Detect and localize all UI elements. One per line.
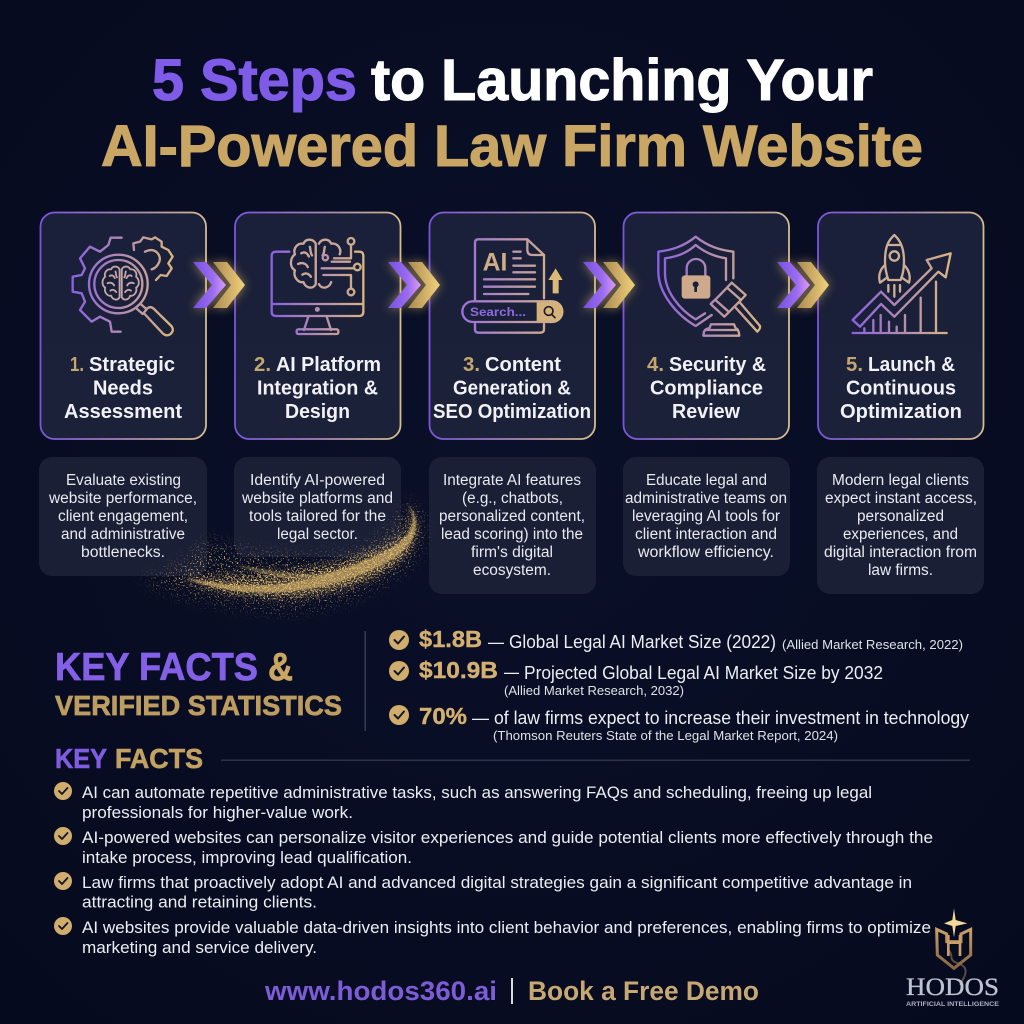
step 4 heading: 4.: [647, 354, 664, 376]
panel: step 3 description: ecosystem.: [473, 562, 551, 579]
panel: step 1 description: website performance,: [48, 490, 197, 507]
icon: check badge: [54, 917, 72, 935]
key fact 3: Law firms that proactively adopt AI and advanced digital strategies gain a significant competitive advantage in: [82, 873, 912, 892]
heading: key facts: [55, 743, 203, 774]
step 3 heading: 3.: [463, 354, 480, 376]
title line 2: AI-Powered Law Firm Website: [101, 114, 923, 179]
panel: step 3 description: lead scoring) into the: [441, 526, 583, 543]
arrow: step 1 to 2: [193, 262, 245, 308]
step 5 heading: Continuous: [846, 378, 956, 400]
step 3 heading: Generation &: [453, 378, 571, 400]
footer call to action: [264, 976, 759, 1006]
step 2 heading: 2.: [254, 354, 271, 376]
step 1 heading: Assessment: [64, 401, 182, 423]
icon: monitor with AI brain: [272, 238, 363, 334]
panel: step 5 card: [818, 212, 984, 439]
panel: step 3 description: [429, 457, 596, 594]
key fact 2: intake process, improving lead qualification.: [82, 848, 412, 867]
heading: key facts and verified statistics: VERIFIED STATISTICS: [55, 690, 342, 721]
panel: step 5 description: Modern legal clients: [832, 472, 969, 489]
heading: key facts and verified statistics: [55, 646, 342, 721]
footer call to action: Book a Free Demo: [528, 976, 759, 1006]
panel: step 1 description: bottlenecks.: [81, 544, 165, 561]
panel: step 2 description: website platforms and: [241, 490, 393, 507]
step 5 heading: 5.: [846, 354, 863, 376]
panel: step 5 description: experiences, and: [843, 526, 958, 543]
statistic: 10.9B projected size: Projected Global Legal AI Market Size by 2032: [524, 663, 883, 683]
panel: step 2 description: legal sector.: [277, 526, 358, 543]
gold dust swirl: [137, 500, 423, 610]
arrow: step 4 to 5: [777, 262, 829, 308]
statistic: 10.9B projected size: —: [504, 662, 519, 682]
key fact 1: AI can automate repetitive administrative tasks, such as answering FAQs and scheduling, freeing up legal: [82, 783, 872, 802]
step 4 heading: Security &: [669, 354, 766, 376]
icon: AI document with search bar: [462, 239, 563, 333]
statistic: 70 percent of firms: (Thomson Reuters State of the Legal Market Report, 2024): [493, 728, 838, 743]
statistic: 1.8B market size: Global Legal AI Market Size (2022): [509, 632, 776, 652]
step 4 heading: Compliance: [650, 378, 763, 400]
statistic: 1.8B market size: —: [488, 632, 504, 652]
panel: step 2 description: tools tailored for the: [249, 508, 386, 525]
panel: step 1 description: Evaluate existing: [66, 472, 181, 489]
icon: AI document with search bar: AI: [483, 250, 507, 277]
heading: key facts: KEY: [55, 743, 107, 774]
icon: rocket and growth chart: [853, 235, 951, 333]
statistic: 1.8B market size: $1.8B: [419, 626, 482, 652]
step 4 heading: Review: [672, 401, 740, 423]
icon: check badge: [54, 782, 72, 800]
logo wordmark: HODOS: [906, 974, 999, 1001]
footer call to action: www.hodos360.ai: [264, 976, 497, 1006]
step 3 heading: Content: [485, 354, 561, 376]
panel: step 2 description: Identify AI-powered: [250, 472, 385, 489]
panel: step 1 description: [39, 457, 207, 576]
panel: step 5 description: expect instant access,: [825, 490, 977, 507]
panel: step 3 description: (e.g., chatbots,: [462, 490, 563, 507]
step 1 heading: Needs: [93, 378, 153, 400]
panel: step 4 description: [623, 457, 790, 576]
step 2 heading: Design: [285, 401, 350, 423]
panel: step 3 description: firm's digital: [471, 544, 553, 561]
step 5 heading: Optimization: [840, 401, 962, 423]
panel: step 2 card: [235, 212, 400, 439]
statistic: 1.8B market size: [389, 626, 963, 652]
panel: step 3 description: Integrate AI features: [443, 472, 581, 489]
panel: step 4 description: leveraging AI tools for: [632, 508, 780, 525]
key fact 3: [54, 872, 912, 912]
panel: step 4 description: workflow efficiency.: [637, 544, 774, 561]
panel: step 1 card: [40, 212, 206, 439]
step 3 heading: [433, 354, 591, 423]
logo tagline: ARTIFICIAL INTELLIGENCE: [906, 1001, 1000, 1008]
icon: check badge: [54, 872, 72, 890]
step 1 heading: [64, 354, 182, 423]
panel: step 4 description: Educate legal and: [646, 472, 767, 489]
step 4 heading: [647, 354, 766, 423]
panel: step 4 card: [624, 212, 789, 439]
icon: check badge: [389, 630, 409, 650]
icon: AI document with search bar: Search...: [470, 306, 526, 319]
step 5 heading: Launch &: [868, 354, 955, 376]
icon: check badge: [389, 661, 409, 681]
heading: key facts and verified statistics: KEY FACTS: [55, 646, 258, 689]
panel: step 2 description: [234, 457, 401, 557]
title line 1: 5 Steps: [152, 48, 357, 113]
statistic: 70 percent of firms: [389, 703, 969, 743]
statistic: 1.8B market size: (Allied Market Research, 2022): [782, 637, 963, 652]
title line 1: [152, 48, 873, 113]
statistic: 10.9B projected size: [389, 657, 883, 698]
title: [101, 48, 923, 179]
statistic: 70 percent of firms: 70%: [419, 703, 467, 729]
key fact 3: attracting and retaining clients.: [82, 892, 317, 912]
key fact 4: AI websites provide valuable data-driven insights into client behavior and preferences, enabling firms to optimize: [82, 918, 931, 937]
step 2 heading: [254, 354, 381, 423]
heading: key facts: FACTS: [115, 743, 203, 774]
arrow: step 2 to 3: [388, 262, 440, 308]
key fact 4: marketing and service delivery.: [82, 938, 317, 957]
step 1 heading: 1.: [70, 354, 84, 376]
statistic: 70 percent of firms: —: [472, 708, 489, 728]
key fact 1: professionals for higher-value work.: [82, 803, 353, 822]
heading: key facts and verified statistics: &: [268, 646, 293, 689]
panel: step 4 description: administrative teams on: [625, 490, 787, 507]
key fact 2: AI-powered websites can personalize visitor experiences and guide potential clients more effectively through the: [82, 828, 933, 847]
logo: Hodos: [906, 908, 1000, 1008]
step 1 heading: Strategic: [89, 354, 175, 376]
panel: step 5 description: digital interaction from: [824, 544, 977, 561]
step 5 heading: [840, 354, 962, 423]
step 2 heading: AI Platform: [276, 354, 381, 376]
panel: step 1 description: and administrative: [61, 526, 185, 543]
icon: check badge: [389, 705, 409, 725]
statistic: 10.9B projected size: $10.9B: [419, 657, 498, 683]
statistic: 70 percent of firms: of law firms expect to increase their investment in technology: [494, 708, 969, 728]
logo emblem: [937, 908, 971, 985]
panel: step 5 description: law firms.: [868, 562, 933, 579]
panel: step 3 description: personalized content,: [439, 508, 585, 525]
step 3 heading: SEO Optimization: [433, 401, 591, 423]
icon: check badge: [54, 827, 72, 845]
step 2 heading: Integration &: [257, 378, 378, 400]
arrow: step 3 to 4: [583, 262, 635, 308]
key fact 2: [54, 827, 933, 867]
icon: gear, magnifier and brain: [73, 237, 173, 335]
key fact 4: [54, 917, 931, 957]
icon: shield, lock and gavel: [658, 237, 760, 336]
panel: step 5 description: personalized: [857, 508, 944, 525]
panel: step 5 description: [817, 457, 984, 594]
panel: step 3 card: [430, 212, 595, 439]
title line 1: to Launching Your: [371, 48, 873, 113]
panel: step 4 description: client interaction and: [635, 526, 777, 543]
key fact 1: [54, 782, 872, 822]
panel: step 1 description: client engagement,: [58, 508, 188, 525]
statistic: 10.9B projected size: (Allied Market Research, 2032): [504, 683, 684, 698]
